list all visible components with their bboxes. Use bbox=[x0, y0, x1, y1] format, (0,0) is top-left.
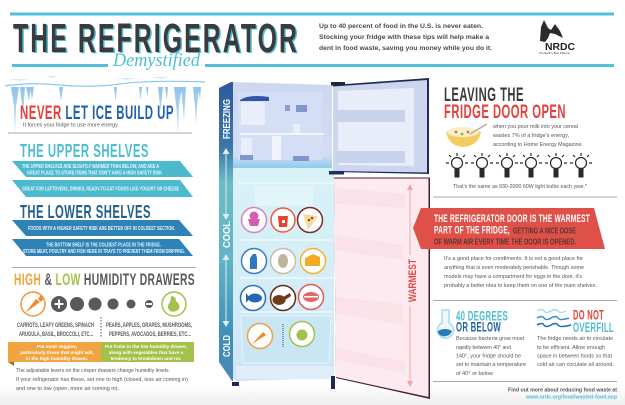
icon: pear bbox=[162, 292, 186, 316]
ribbon: lower 2: THE BOTTOM SHELF IS THE COLDEST PLACE IN THE FRIDGE. bbox=[46, 242, 161, 248]
high humidity list: CARROTS, LEAFY GREENS, SPINACH bbox=[17, 323, 94, 329]
body text: rapidly between 40° and bbox=[456, 345, 511, 351]
panel: upper and lower shelves bbox=[12, 140, 193, 256]
ribbon: upper 2: GREAT FOR LEFTOVERS, DRINKS, READY-TO-EAT FOODS LIKE YOGURT OR CHEESE bbox=[22, 186, 179, 192]
heading: LEAVING THE bbox=[444, 85, 524, 106]
callout: low humidity: Put fruits in the low humidity drawer, bbox=[105, 344, 187, 349]
freezer door bbox=[329, 78, 429, 174]
panel: do not overfill bbox=[537, 308, 614, 368]
door text: anything that is even moderately perishable. Though some bbox=[444, 265, 584, 271]
lower shelves bbox=[238, 183, 333, 312]
side strip with temperature scale bbox=[219, 82, 335, 389]
icon: flask bbox=[438, 310, 453, 338]
icon: yogurt bbox=[271, 208, 295, 232]
title: THE REFRIGERATOR bbox=[14, 16, 300, 62]
body text bbox=[537, 336, 614, 368]
logo: NRDC bbox=[539, 20, 575, 55]
door text: It's a good place for condiments. It is not a good place for bbox=[444, 256, 583, 262]
callout: high humidity: Put most veggies, bbox=[37, 344, 77, 349]
high humidity list bbox=[17, 323, 94, 338]
heading: lower shelves: THE LOWER SHELVES bbox=[20, 201, 151, 222]
icicles bbox=[5, 76, 205, 135]
icon: milk bbox=[242, 248, 266, 274]
panel: never let ice build up bbox=[5, 76, 205, 135]
icon: fish bbox=[240, 286, 266, 310]
humidity paragraph: If your refrigerator has these, set one to high (closed, less air coming in) bbox=[16, 377, 188, 383]
label: freezing: FREEZING bbox=[222, 99, 233, 139]
header bbox=[10, 12, 614, 71]
door text: probably a better idea to keep them on one of the main shelves. bbox=[444, 283, 597, 289]
banner: refrigerator door warmest: GETTING A NICE DOSE bbox=[513, 226, 576, 236]
callout: high humidity: particularly those that might wilt, bbox=[20, 350, 94, 355]
bulb caption: That's the same as 930-2000 60W light bulbs each year.* bbox=[453, 184, 587, 190]
label: cool: COOL bbox=[222, 221, 233, 248]
footer link: www.nrdc.org/food/wasted-food.asp bbox=[525, 394, 618, 400]
callout: low humidity: along with vegetables that have a bbox=[109, 350, 184, 355]
ribbon: upper 1: THE UPPER SHELVES ARE SLIGHTLY WARMER THAN BELOW, AND ARE A bbox=[22, 164, 159, 170]
icon: light bulbs bbox=[446, 153, 592, 178]
heading: upper shelves: THE UPPER SHELVES bbox=[20, 140, 149, 161]
body text: space in between foods so that bbox=[537, 354, 612, 360]
high humidity list: ARUGULA, BASIL, BROCCOLI, ETC... bbox=[19, 332, 93, 338]
banner: refrigerator door warmest bbox=[413, 208, 605, 249]
body text: wastes 7% of a fridge's energy, bbox=[492, 133, 569, 139]
icon: steak bbox=[298, 284, 324, 310]
title bbox=[13, 15, 300, 62]
intro text: dent in food waste, saving you money while you do it. bbox=[319, 45, 492, 52]
door text bbox=[444, 256, 597, 289]
humidity paragraph: and one to low (open, more air coming in). bbox=[16, 386, 119, 392]
icon: pizza bbox=[298, 208, 322, 232]
label: cold: COLD bbox=[222, 335, 233, 357]
footer link bbox=[508, 388, 618, 400]
intro text bbox=[319, 23, 492, 52]
food icons bbox=[240, 208, 326, 348]
body text: The fridge needs air to circulate bbox=[537, 336, 613, 342]
icon: chicken leg bbox=[270, 286, 296, 310]
panel: 40 degrees or below bbox=[438, 308, 526, 377]
heading: HIGH & LOW HUMIDITY DRAWERS bbox=[14, 271, 195, 289]
body text bbox=[456, 336, 526, 377]
footer link: Find out more about reducing food waste at bbox=[508, 388, 617, 394]
ribbon: upper 1: GREAT PLACE TO STORE ITEMS THAT DON'T HAVE A HIGH SAFETY RISK bbox=[27, 170, 162, 176]
ribbon: lower 1 bbox=[12, 220, 193, 236]
icon: cheese bbox=[300, 248, 326, 274]
icon: cereal bowl bbox=[446, 124, 487, 147]
low humidity list: PEPPERS, AVOCADOS, BERRIES, ETC... bbox=[109, 332, 191, 338]
heading: NEVER LET ICE BUILD UP bbox=[20, 103, 174, 124]
ribbon: lower 1: FOODS WITH A HIGHER SAFETY RISK ARE BETTER OFF IN COLDEST SECTION. bbox=[28, 226, 175, 232]
callout: high humidity: in the high humidity drawer. bbox=[26, 356, 88, 361]
ribbon: lower 2: STORE MEAT, POULTRY AND FISH HERE IN TRAYS TO PREVENT THEM FROM DRIPPING. bbox=[23, 249, 185, 255]
intro text: Up to 40 percent of food in the U.S. is never eaten. bbox=[319, 23, 483, 30]
ribbon: upper 1 bbox=[12, 161, 193, 177]
heading: 40 DEGREES bbox=[456, 308, 508, 324]
warmest scale: WARMEST bbox=[407, 259, 419, 302]
body text: set to maintain a temperature bbox=[456, 362, 526, 368]
body text: cold air can circulate all around. bbox=[537, 362, 614, 368]
humidity paragraph: The adjustable levers on the crisper drawers change humidity levels. bbox=[16, 368, 170, 374]
callout: high humidity bbox=[8, 342, 101, 366]
arrows bbox=[222, 148, 230, 327]
icon: cupcake bbox=[242, 208, 266, 232]
body text: of 40° or below bbox=[456, 371, 493, 377]
body text: when you pour milk into your cereal bbox=[492, 124, 578, 130]
freezer compartment bbox=[231, 82, 332, 168]
subtitle: Demystified: Demystified bbox=[112, 50, 200, 71]
caption: It forces your fridge to use more energy. bbox=[23, 122, 119, 128]
fridge illustration bbox=[219, 78, 430, 399]
ribbon: upper 2 bbox=[12, 180, 193, 197]
callout: low humidity bbox=[101, 342, 194, 362]
icon: carrot bbox=[248, 324, 272, 348]
body text: according to Home Energy Magazine. bbox=[493, 142, 583, 148]
icon: egg bbox=[270, 248, 296, 274]
fridge body lower section bbox=[232, 168, 334, 381]
body text bbox=[492, 124, 583, 148]
logo: NRDC: NRDC bbox=[545, 41, 575, 53]
icon: apple bbox=[290, 322, 314, 346]
body text: Because bacteria grow most bbox=[456, 336, 524, 342]
low humidity list: PEARS, APPLES, GRAPES, MUSHROOMS, bbox=[106, 323, 192, 329]
icon: carrot bbox=[21, 292, 45, 316]
low humidity list bbox=[106, 323, 192, 338]
logo: NRDC: The Earth's Best Defense bbox=[539, 51, 571, 55]
panel: 40 degrees or below: OR BELOW bbox=[456, 320, 501, 334]
body text: 140°, your fridge should be bbox=[456, 354, 521, 360]
body text: to be efficient. Allow enough bbox=[537, 345, 605, 351]
intro text: Stocking your fridge with these tips will help make a bbox=[319, 34, 489, 41]
icon: humidity scale bbox=[51, 296, 153, 312]
callout: low humidity: tendency to breakdown and rot. bbox=[111, 356, 181, 361]
ribbon: lower 2 bbox=[12, 239, 193, 256]
door text: models may have a compartment for eggs in the door, it's bbox=[444, 274, 582, 280]
icon: air waves bbox=[537, 310, 571, 326]
fridge door lower bbox=[334, 178, 430, 399]
banner: refrigerator door warmest: PART OF THE FRIDGE, bbox=[434, 224, 510, 236]
humidity paragraph bbox=[16, 368, 188, 392]
panel: leaving the fridge door open bbox=[444, 85, 592, 190]
warmest scale bbox=[407, 184, 419, 387]
crisper drawer bbox=[241, 316, 331, 363]
panel: humidity drawers bbox=[8, 271, 195, 392]
title: THE REFRIGERATOR bbox=[13, 15, 299, 61]
